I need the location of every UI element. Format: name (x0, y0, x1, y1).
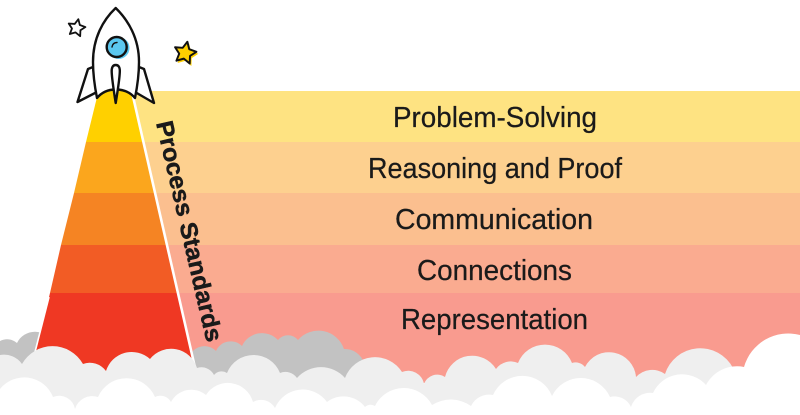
white foreground clouds (0, 333, 800, 415)
icon: yellow star (172, 39, 200, 67)
standard label: Problem-Solving: Problem-Solving (393, 102, 597, 134)
standard label: Connections: Connections (417, 255, 572, 287)
light grey clouds (0, 345, 800, 415)
standard label: Communication: Communication (395, 204, 593, 236)
icon: outlined star (67, 17, 87, 37)
grey smoke clouds (0, 331, 364, 400)
standard label: Reasoning and Proof: Reasoning and Proof (368, 153, 623, 185)
icon: rocket (78, 8, 154, 103)
rotated heading: Process Standards: Process Standards (150, 118, 227, 345)
standard label: Representation: Representation (401, 304, 588, 336)
rocket exhaust trail (31, 89, 196, 372)
standards bands (125, 91, 800, 383)
